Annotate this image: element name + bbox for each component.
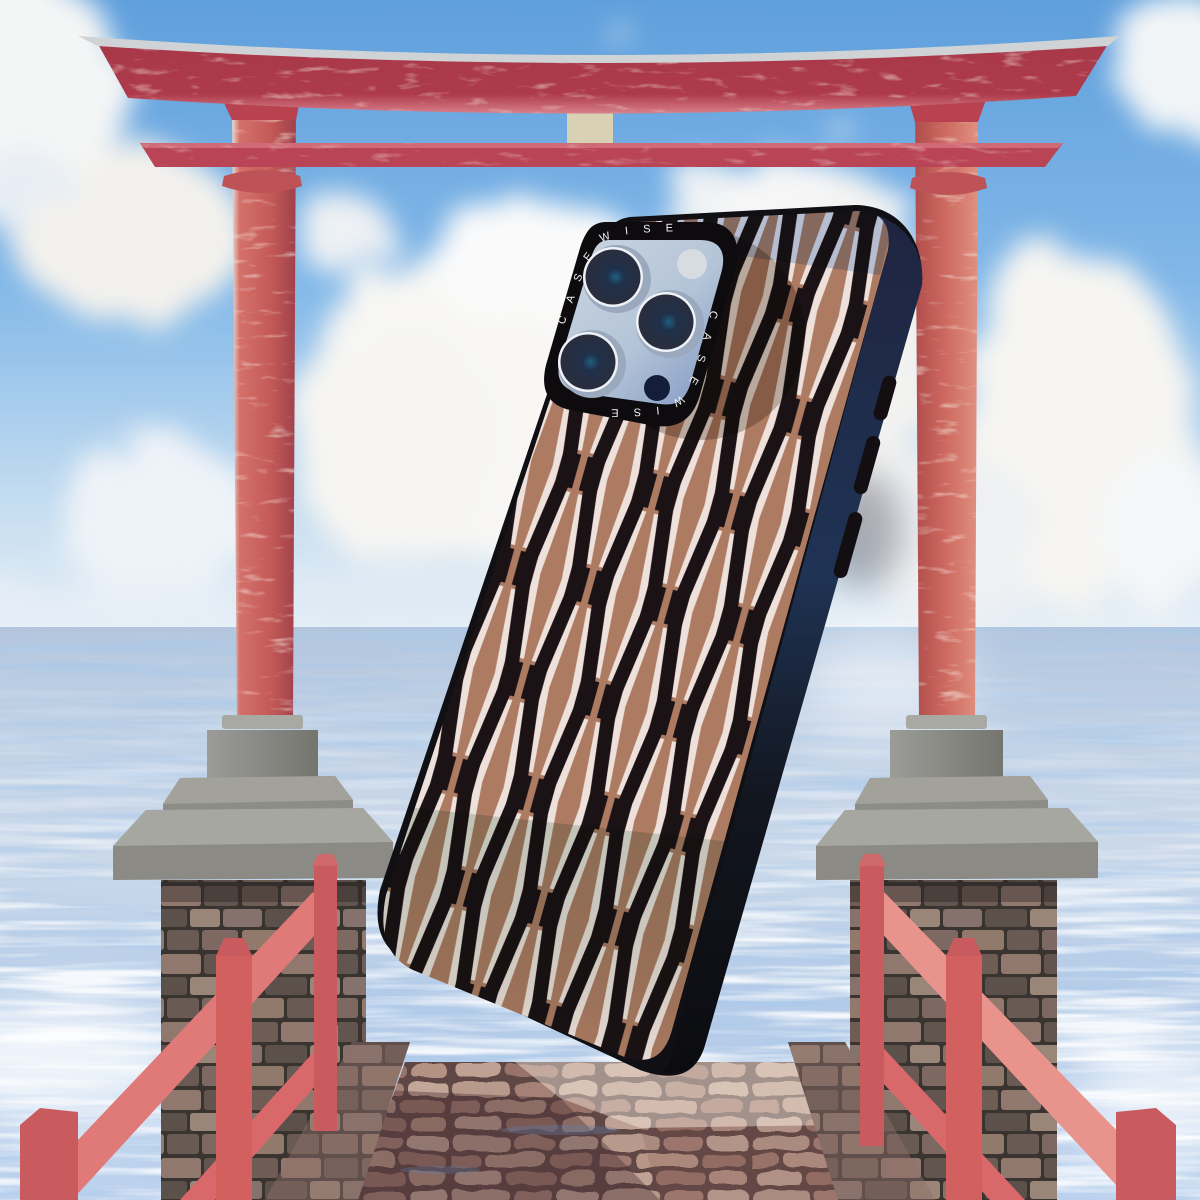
camera glass [558,240,723,404]
case body [378,205,922,1076]
lens top [583,245,651,313]
sky [0,0,1200,628]
right curb [788,1042,935,1200]
top beam [78,36,1120,114]
brand text right: CASEWISE [612,311,718,417]
left column [232,100,296,720]
centre strut [567,105,613,143]
side buttons [832,374,898,580]
cloud shadow beside phone [822,472,902,588]
right stone base [816,715,1098,1200]
left railing [20,854,339,1200]
column rings [222,170,987,195]
sensor [644,375,670,401]
left stone base [113,715,393,1200]
lower sea reflection [383,808,724,1060]
lens bottom [558,330,626,398]
brand text left: CASEWISE [558,224,673,324]
left curb [265,1042,410,1200]
stone bridge [265,1042,935,1200]
camera module [544,222,737,426]
magnetic ring reflection [644,236,805,440]
right railing [858,854,1176,1200]
case side [660,211,922,1073]
bridge paving [358,1062,838,1200]
right column [915,100,978,720]
torii gate [78,36,1120,720]
tie beam [140,143,1063,167]
top sky reflection [677,211,889,275]
column caps [216,86,991,122]
phone case [378,205,922,1076]
lens right [636,290,704,358]
sea [0,627,1200,1200]
clouds [0,0,1200,628]
patterned back [370,195,900,1090]
flash [677,249,707,279]
